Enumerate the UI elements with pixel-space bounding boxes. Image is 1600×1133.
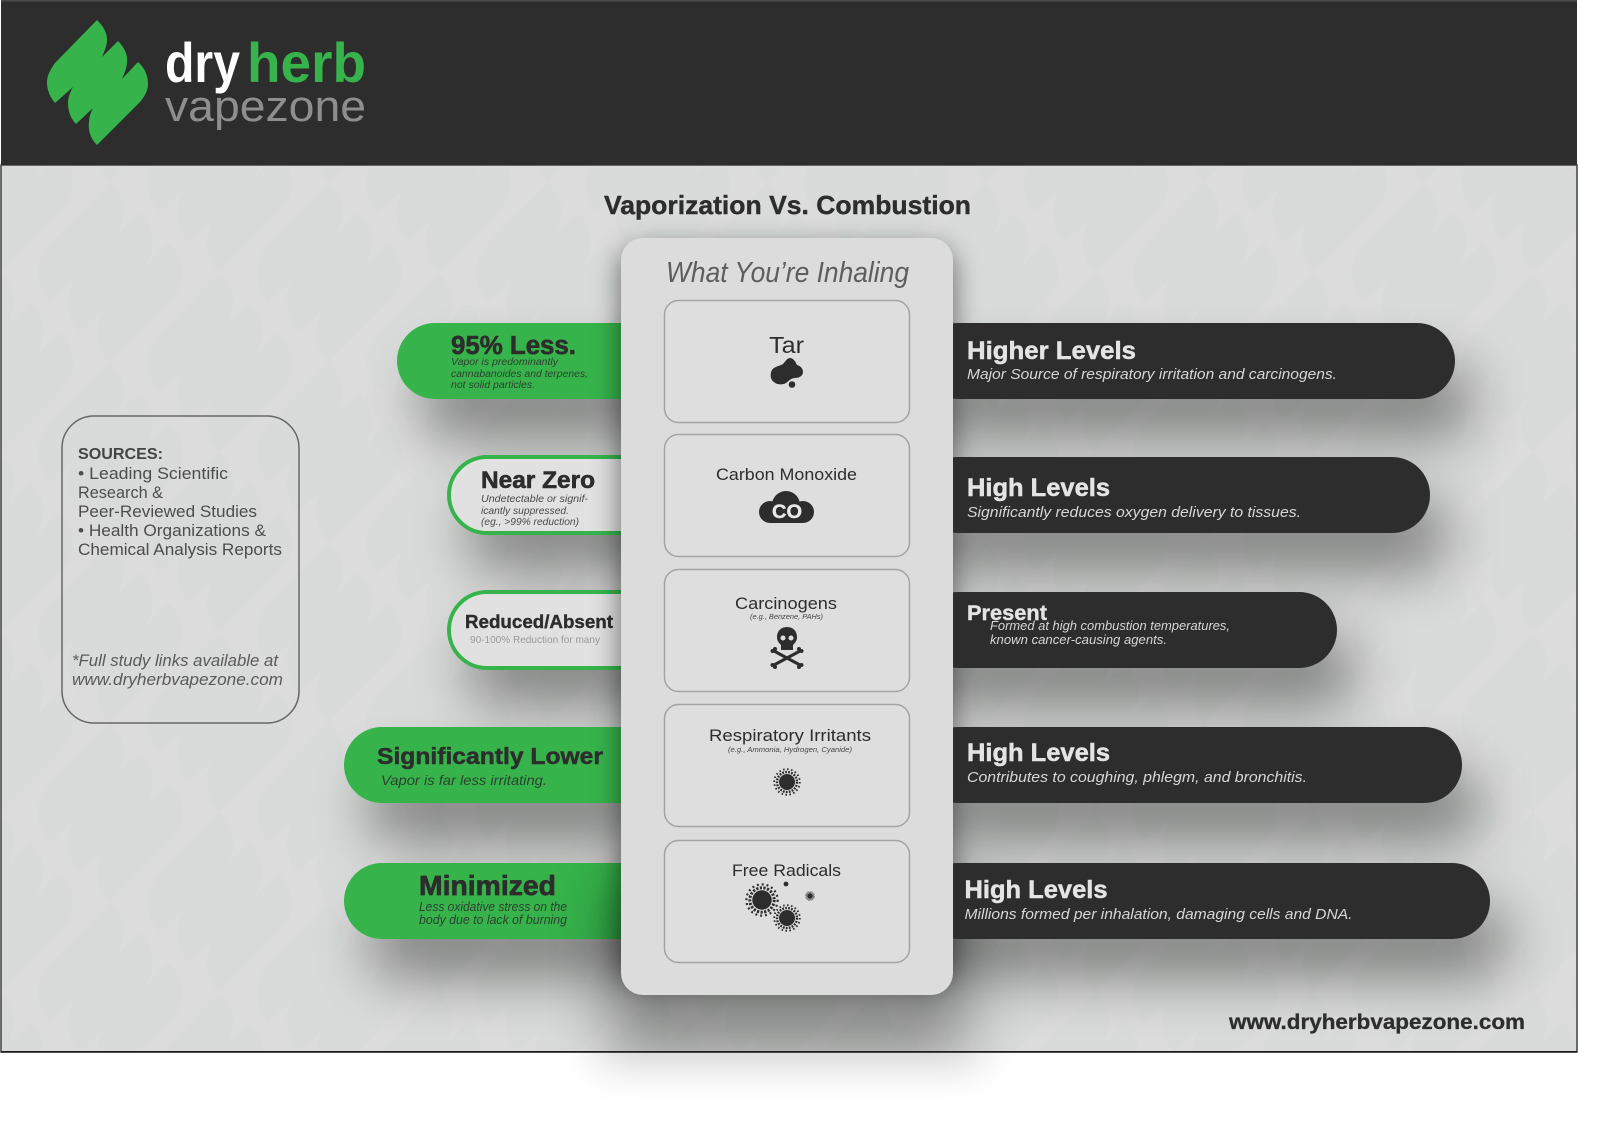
outlined pill: carbon monoxide	[449, 457, 689, 533]
panel heading: What You’re Inhaling	[666, 257, 909, 289]
panel: sources: • Health Organizations &	[78, 521, 267, 540]
dark pill: respiratory irritants	[920, 727, 1462, 803]
green pill: tar: Vapor is predominantly	[451, 356, 559, 368]
logo mark	[47, 20, 148, 145]
logo wordmark: vapezone	[165, 82, 366, 131]
icon: skull and crossbones	[770, 627, 804, 669]
icon: irritant particle	[774, 769, 800, 795]
panel: sources: • Leading Scientific	[78, 464, 229, 483]
panel: sources: *Full study links available at	[72, 652, 279, 670]
pill drop shadows	[365, 363, 1510, 979]
card: tar	[664, 300, 910, 422]
outer panel shadow below frame	[600, 1000, 980, 1062]
green pill: tar: cannabanoides and terpenes,	[451, 368, 588, 380]
outlined pill: carcinogens: Reduced/Absent	[465, 611, 613, 632]
icon: tar blob	[771, 358, 803, 388]
green pill: respiratory irritants: Vapor is far less irritating.	[381, 772, 547, 788]
card: carcinogens: Carcinogens	[735, 594, 837, 613]
outlined pill: carcinogens	[449, 592, 689, 668]
outlined pill: carbon monoxide: Undetectable or signif-	[481, 493, 589, 505]
green pill: tar: 95% Less.	[451, 332, 576, 360]
dark pill: tar: Higher Levels	[967, 337, 1136, 365]
card: carcinogens: (e.g., Benzene, PAHs)	[750, 612, 823, 621]
website url: www.dryherbvapezone.com	[1228, 1011, 1525, 1034]
green pill: free radicals	[344, 863, 674, 939]
card: carcinogens	[664, 570, 910, 692]
outlined pill: carbon monoxide: icantly suppressed.	[481, 505, 569, 517]
green pill: free radicals: body due to lack of burning	[419, 913, 567, 927]
dark pill: carcinogens	[920, 592, 1337, 668]
card: tar: Tar	[769, 332, 804, 358]
dark pill: free radicals: Millions formed per inhalation, damaging cells and DNA.	[964, 907, 1352, 923]
green pill: tar: not solid particles.	[451, 379, 535, 391]
panel: sources: Chemical Analysis Reports	[78, 540, 282, 559]
dark pill: tar: Major Source of respiratory irritation and carcinogens.	[967, 367, 1337, 383]
icon: CO cloud: CO	[772, 502, 802, 523]
logo wordmark	[165, 31, 366, 131]
card: carbon monoxide: Carbon Monoxide	[716, 466, 857, 484]
dark pill: free radicals	[920, 863, 1490, 939]
card: respiratory irritants: Respiratory Irritants	[709, 726, 871, 745]
header bar	[1, 0, 1577, 165]
dark pill: carbon monoxide: Significantly reduces oxygen delivery to tissues.	[967, 505, 1301, 521]
logo wordmark: herb	[247, 31, 366, 94]
card: carbon monoxide	[664, 434, 910, 556]
dark pill: carbon monoxide	[920, 457, 1430, 533]
green pill: respiratory irritants	[344, 727, 674, 803]
card: free radicals	[664, 840, 910, 962]
panel: sources: Research &	[78, 483, 164, 502]
green pill: free radicals: Minimized	[419, 870, 556, 901]
outlined pill: carbon monoxide: Near Zero	[481, 467, 595, 494]
panel: sources: www.dryherbvapezone.com	[72, 671, 283, 689]
dark pill: free radicals: High Levels	[964, 876, 1108, 904]
card: respiratory irritants: (e.g., Ammonia, Hydrogen, Cyanide)	[728, 745, 853, 754]
green pill: tar	[397, 323, 677, 399]
outlined pill: carbon monoxide: (eg., >99% reduction)	[481, 516, 579, 528]
icon: CO cloud	[759, 491, 814, 523]
card: respiratory irritants	[664, 704, 910, 826]
card: free radicals: Free Radicals	[732, 861, 841, 880]
logo wordmark: dry	[165, 31, 240, 94]
green pill: respiratory irritants: Significantly Lower	[377, 743, 603, 769]
icon: free radical particles	[746, 882, 815, 931]
dark pill: carcinogens: Present	[967, 602, 1047, 625]
dark pill: carcinogens: known cancer-causing agents.	[990, 633, 1167, 647]
panel: sources	[62, 416, 299, 723]
dark pill: respiratory irritants: Contributes to coughing, phlegm, and bronchitis.	[967, 770, 1307, 786]
title: Vaporization Vs. Combustion	[604, 190, 971, 220]
green pill: free radicals: Less oxidative stress on the	[419, 900, 567, 914]
dark pill: carcinogens: Formed at high combustion temperatures,	[990, 619, 1230, 633]
panel: sources: SOURCES:	[78, 446, 163, 463]
dark pill: tar	[920, 323, 1455, 399]
dark pill: respiratory irritants: High Levels	[967, 739, 1110, 767]
panel: sources: Peer-Reviewed Studies	[78, 502, 257, 521]
outlined pill: carcinogens: 90-100% Reduction for many	[470, 634, 601, 646]
central panel shadow	[610, 248, 965, 1055]
panel: what you're inhaling	[621, 238, 953, 995]
background pattern panel	[1, 165, 1577, 1053]
dark pill: carbon monoxide: High Levels	[967, 474, 1110, 502]
